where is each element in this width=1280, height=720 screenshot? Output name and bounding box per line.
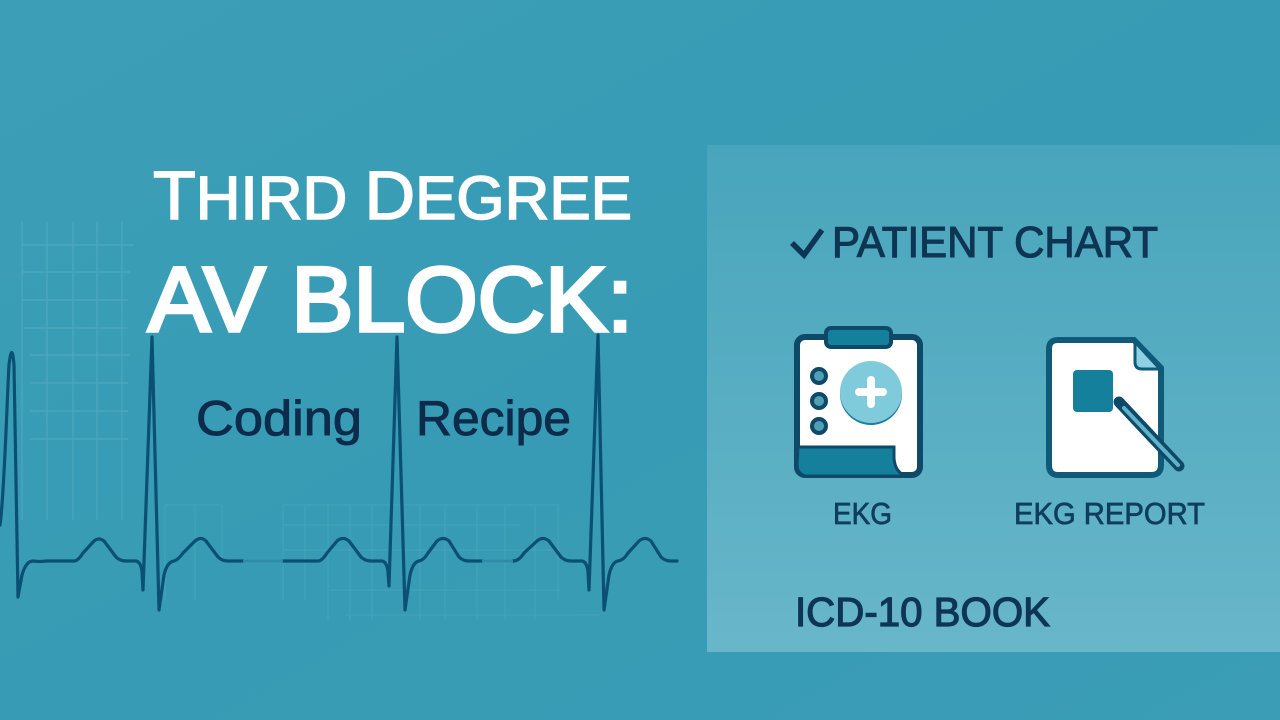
EKG faded gaps: [243, 560, 513, 562]
background grid: bottom: [165, 505, 600, 620]
label: EKG: EKG: [833, 496, 892, 531]
title: AV Block: AV BLOCK:: [148, 249, 633, 351]
subtitle: Recipe: Recipe: [416, 392, 571, 446]
label: ICD-10 book: ICD-10 BOOK: [795, 589, 1050, 635]
label: EKG report: EKG REPORT: [1014, 496, 1205, 531]
icon: check mark: [792, 230, 822, 255]
heading: patient chart: PATIENT CHART: [832, 218, 1158, 267]
background grid: left: [22, 222, 134, 520]
subtitle: Coding: Coding: [196, 392, 362, 446]
EKG waveform: [0, 335, 677, 610]
icon: pen: [1119, 402, 1179, 466]
icon: EKG clipboard: [797, 328, 920, 476]
title: Third Degree: THIRD DEGREE: [153, 157, 632, 234]
icon: EKG report document: [1049, 340, 1179, 475]
panel: chart checklist: [707, 145, 1280, 652]
